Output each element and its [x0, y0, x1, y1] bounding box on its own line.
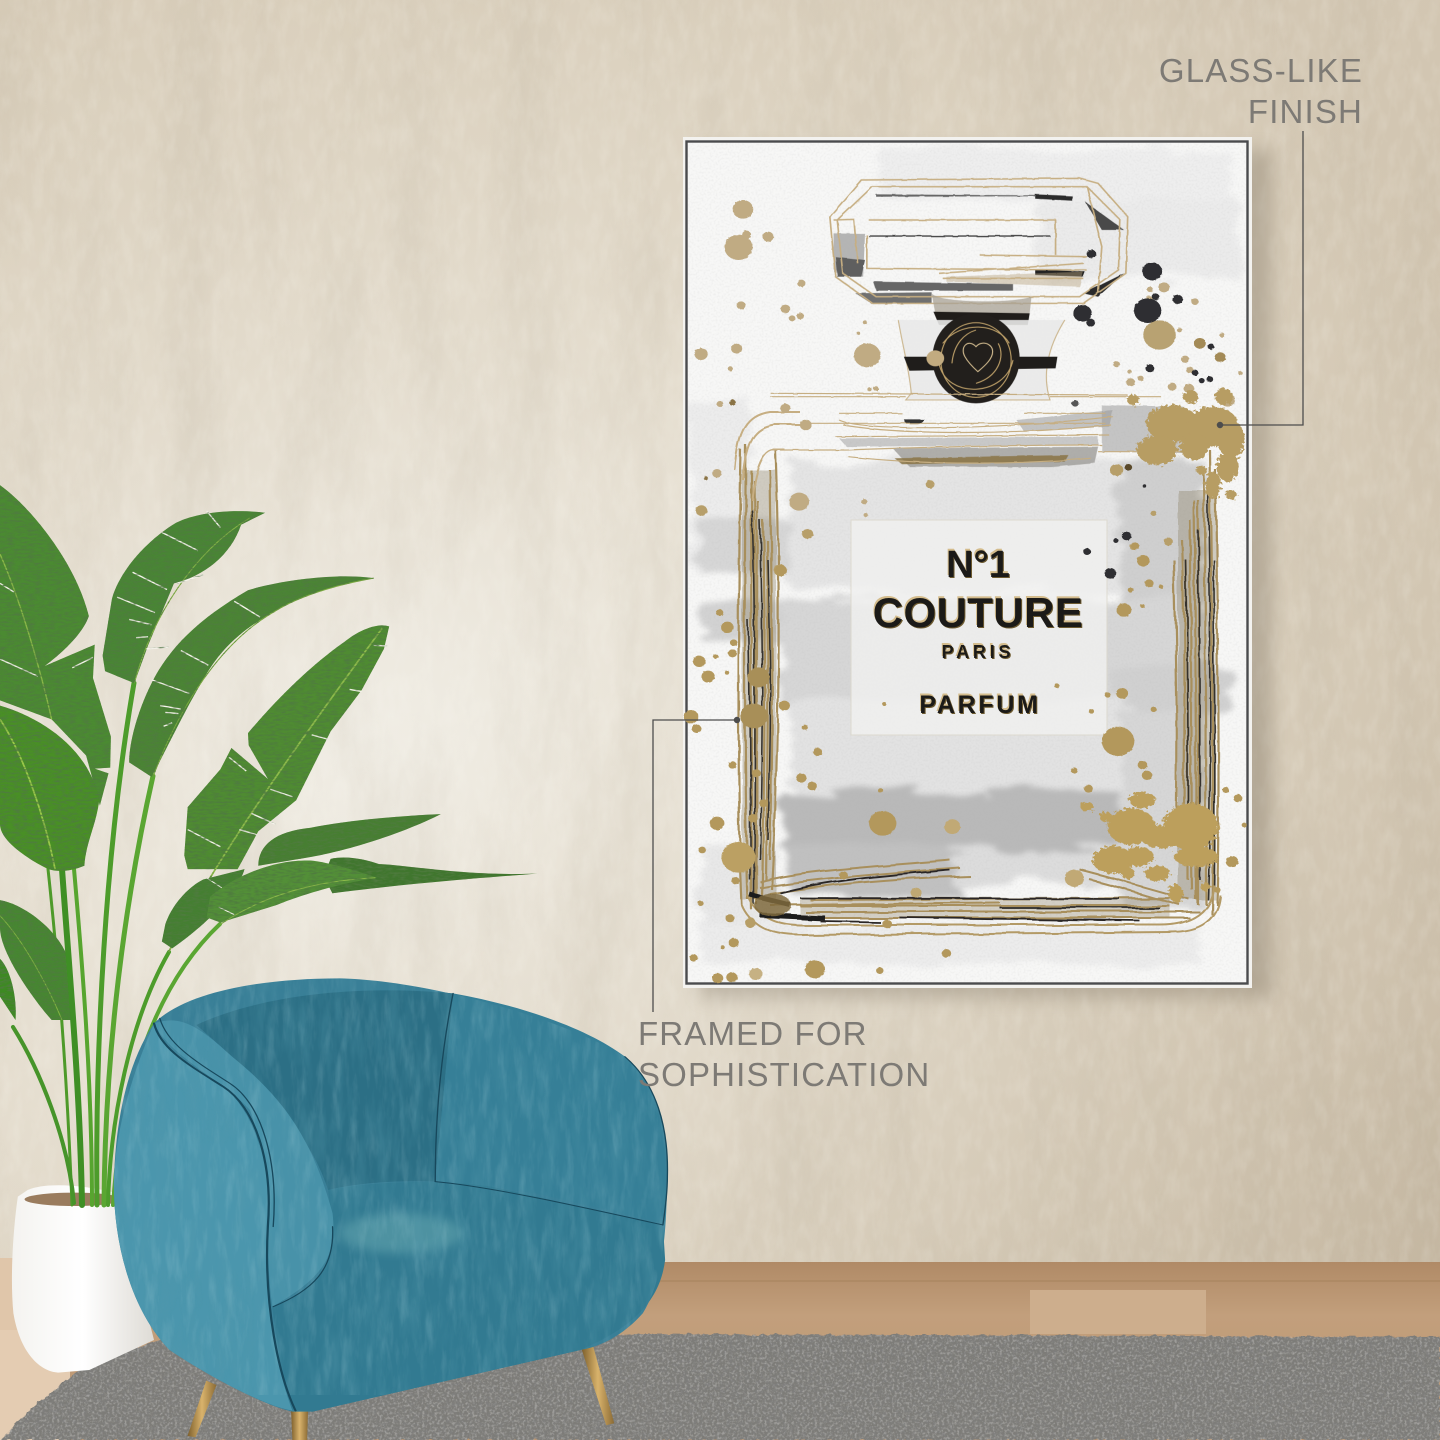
- leaf: lower long: [324, 857, 537, 893]
- plant leaves: [0, 485, 537, 1020]
- bottle shoulder: [771, 393, 1198, 467]
- callout text: framed for sophistication: [638, 1015, 930, 1093]
- leaf: lower small: [162, 869, 245, 948]
- callout text: glass-like finish: GLASS-LIKE: [1159, 52, 1363, 89]
- plant pot: [12, 1185, 154, 1373]
- bottle side shading: [742, 470, 776, 900]
- callout text: glass-like finish: [1159, 52, 1363, 130]
- label text: PARIS: PARIS: [942, 642, 1014, 662]
- chair piping: [154, 993, 667, 1411]
- chair legs: [187, 1345, 614, 1440]
- callout leader: glass-like finish: [1217, 131, 1303, 428]
- floor: [0, 1258, 1440, 1440]
- frame shadow: [700, 150, 1272, 998]
- leaf: far bottom left: [0, 959, 16, 1020]
- bottle label panel: [851, 520, 1107, 735]
- chair back: [196, 990, 453, 1190]
- gold and black splatter: upper: [694, 200, 1243, 579]
- callout text: framed for sophistication: SOPHISTICATION: [638, 1056, 930, 1093]
- chair seat: [272, 1182, 665, 1412]
- bottle right edge strokes: [1174, 450, 1219, 915]
- gold debris bottom left corner: [745, 894, 791, 928]
- leaf: lower centre: [207, 860, 377, 924]
- inner black line: [686, 142, 1248, 984]
- chair velvet texture: [110, 975, 670, 1395]
- wall art: framed perfume bottle: [683, 137, 1272, 998]
- bottle corners: [735, 412, 800, 500]
- leaf: top left: [0, 485, 111, 805]
- leaf: bottom left: [0, 900, 71, 1020]
- bottle body strokes: [735, 412, 1220, 935]
- callout text: glass-like finish: FINISH: [1248, 93, 1363, 130]
- bottle bottom lines: [760, 860, 1200, 918]
- leaf: lower right: [258, 814, 441, 866]
- watercolor washes: [690, 150, 1240, 965]
- armchair: [110, 975, 670, 1440]
- leaf: large diagonal: [169, 625, 389, 952]
- label text: COUTURE: COUTURE: [873, 589, 1083, 636]
- plant stems: [13, 683, 220, 1205]
- label text: PARFUM: PARFUM: [919, 691, 1041, 719]
- leaf: bright left: [0, 706, 99, 871]
- chair arm: [154, 1020, 333, 1307]
- white frame: [683, 137, 1252, 988]
- callout text: framed for sophistication: FRAMED FOR: [638, 1015, 868, 1052]
- callout leader: framed: [653, 717, 740, 1012]
- paper grain: [688, 143, 1246, 982]
- gold leaf cluster: lower right: [1080, 792, 1218, 902]
- bottle neck and seal: [898, 293, 1065, 403]
- bottle stopper: [830, 178, 1128, 304]
- rug: [0, 1330, 1440, 1440]
- chair body: [114, 978, 667, 1412]
- gold leaf cluster: shoulder right: [1127, 388, 1244, 500]
- gold splatter: lower: [684, 542, 1247, 983]
- leaf: top centre: [103, 511, 265, 683]
- black drops: [1071, 250, 1214, 579]
- leaf: upper arching: [129, 576, 374, 777]
- label text: N°1: N°1: [946, 544, 1010, 586]
- bottle left edge strokes: [738, 445, 779, 910]
